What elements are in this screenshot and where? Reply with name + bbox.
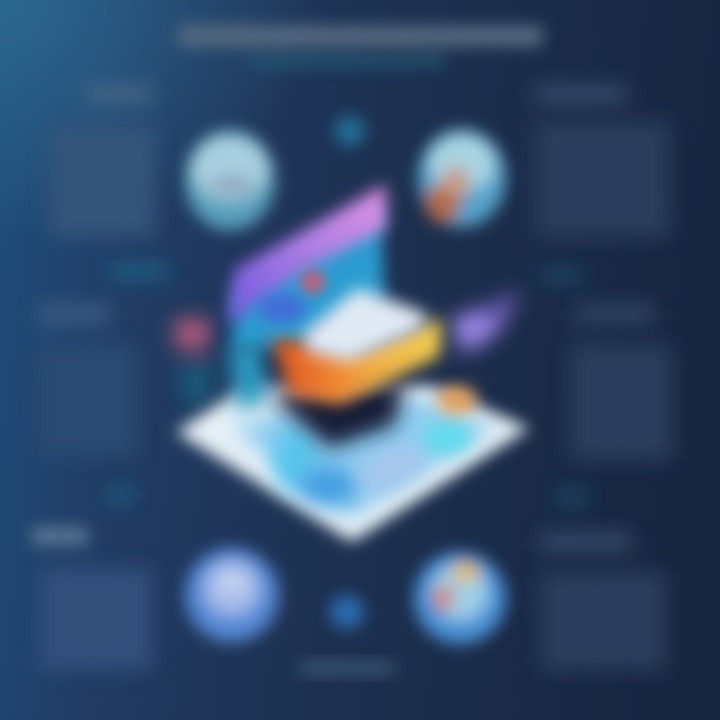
- icon: top right circle: [418, 129, 506, 227]
- icon: right purple arrow: [452, 290, 522, 358]
- isometric platform: [176, 386, 530, 542]
- title: Infographic Overview Title: [180, 23, 540, 48]
- icon: top small dot: [335, 116, 365, 146]
- panel: bottom left text: [32, 528, 152, 670]
- icon: bottom left circle: [185, 548, 279, 642]
- central layered box: [270, 288, 442, 448]
- panel: top right text: [535, 86, 670, 237]
- icon: bottom small dot: [330, 595, 364, 629]
- isometric screen: [228, 184, 386, 412]
- panel: top left text: [50, 86, 155, 237]
- panel: bottom right text: [540, 534, 666, 670]
- icon: left pink tile: [174, 318, 210, 402]
- icon: bottom right circle: [414, 552, 506, 644]
- connector labels: [107, 265, 587, 503]
- panel: middle right text: [570, 306, 672, 460]
- bottom centre caption: [300, 661, 394, 675]
- icon: top left circle: [185, 130, 275, 230]
- title: [178, 23, 543, 65]
- panel: middle left text: [38, 306, 136, 456]
